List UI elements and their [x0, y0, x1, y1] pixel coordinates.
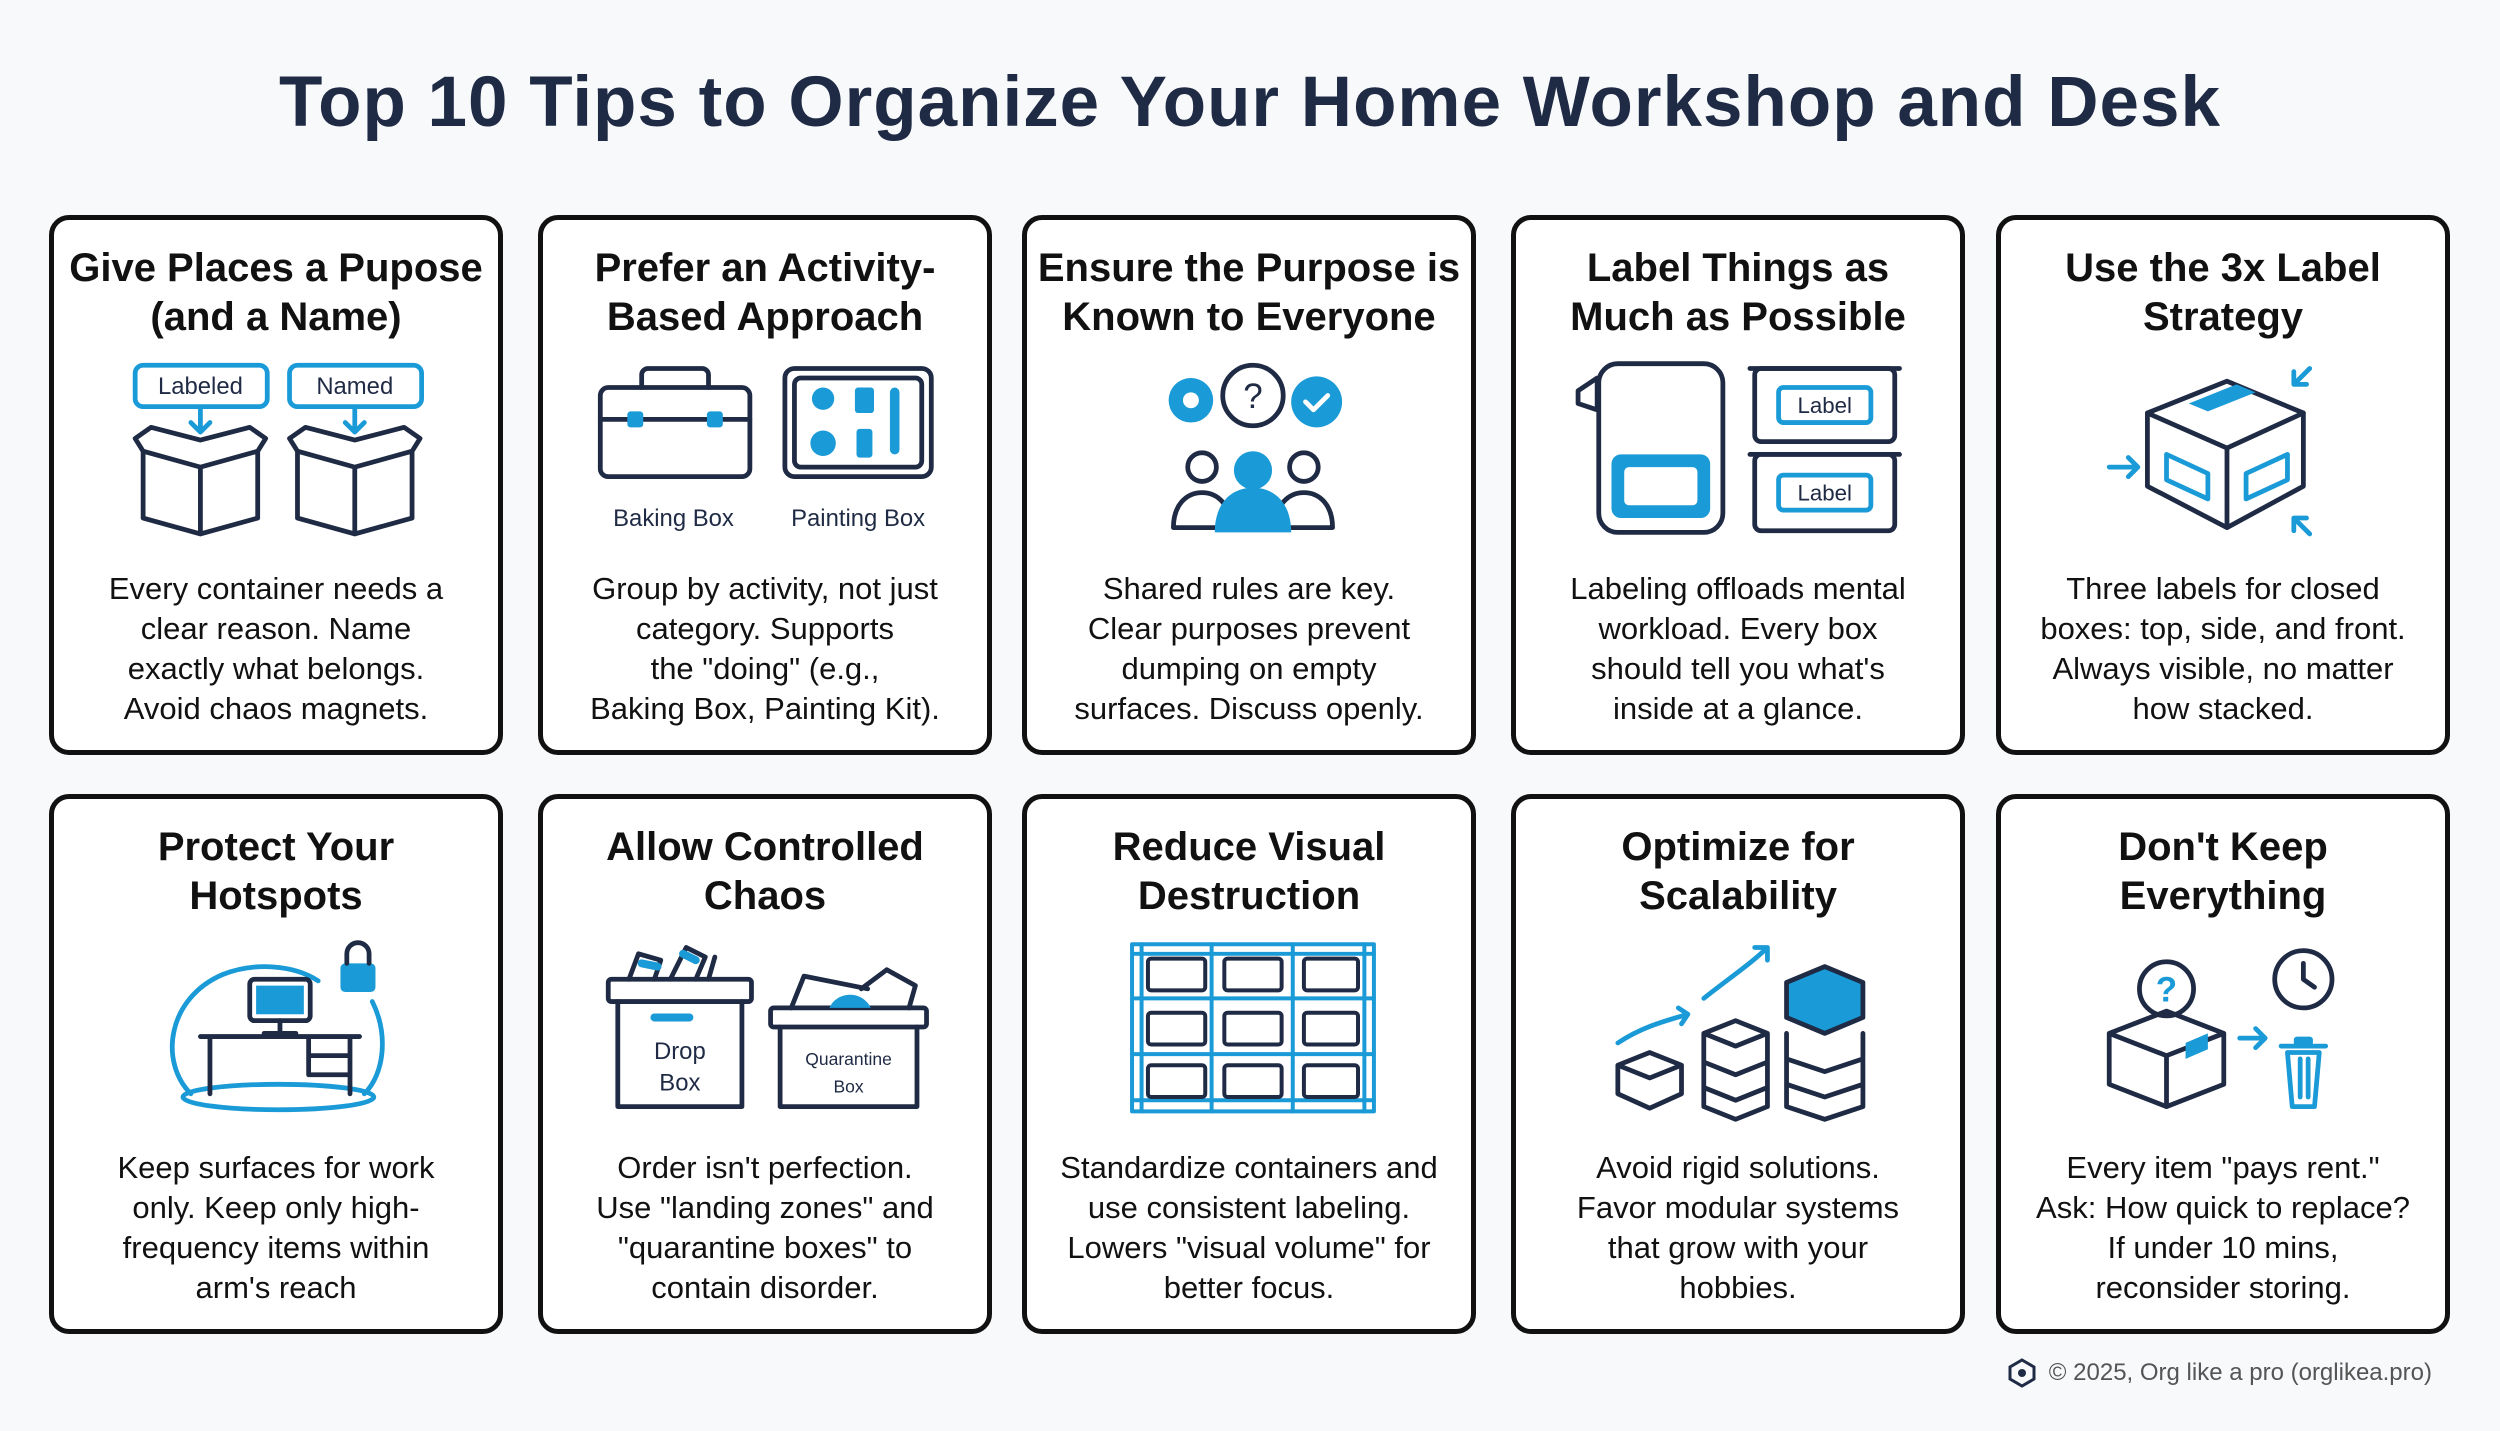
heading: Label Things as — [1587, 246, 1889, 290]
body text: Avoid rigid solutions. — [1596, 1150, 1880, 1185]
body text — [1074, 571, 1424, 726]
heading: Everything — [2120, 874, 2326, 918]
body text — [1577, 1150, 1899, 1305]
icon: drop box and quarantine box: Box — [833, 1076, 864, 1096]
heading — [595, 246, 935, 339]
body text: Group by activity, not just — [592, 571, 938, 606]
body text: hobbies. — [1679, 1270, 1797, 1305]
heading: Known to Everyone — [1062, 295, 1436, 339]
body text: reconsider storing. — [2095, 1270, 2350, 1305]
icon: drop box and quarantine box: Quarantine — [805, 1049, 892, 1069]
body text — [117, 1150, 435, 1305]
body text: Standardize containers and — [1060, 1150, 1438, 1185]
body text — [2040, 571, 2406, 726]
icon: drawer grid — [1130, 942, 1376, 1114]
heading — [2118, 825, 2328, 918]
heading: Give Places a Pupose — [69, 246, 483, 290]
panel: activity-based — [538, 215, 992, 755]
body text: Order isn't perfection. — [617, 1150, 913, 1185]
heading — [1570, 246, 1906, 339]
body text: frequency items within — [123, 1230, 429, 1265]
heading: (and a Name) — [150, 295, 402, 339]
icon: baking and painting boxes — [598, 366, 934, 532]
icon: drop box and quarantine box — [606, 945, 929, 1109]
icon: drop box and quarantine box: Drop — [654, 1038, 706, 1065]
heading — [1113, 825, 1385, 918]
heading: Based Approach — [607, 295, 923, 339]
body text: If under 10 mins, — [2108, 1230, 2338, 1265]
body text: Favor modular systems — [1577, 1190, 1899, 1225]
heading: Much as Possible — [1570, 295, 1906, 339]
heading — [158, 825, 394, 918]
heading — [1621, 825, 1855, 918]
body text: boxes: top, side, and front. — [2040, 611, 2406, 646]
icon: drop box and quarantine box: Box — [659, 1070, 700, 1097]
heading: Allow Controlled — [606, 825, 924, 869]
icon: labeled boxes: Named — [316, 373, 393, 400]
body text: Baking Box, Painting Kit). — [590, 691, 940, 726]
body text: exactly what belongs. — [128, 651, 424, 686]
heading: Reduce Visual — [1113, 825, 1385, 869]
body text: arm's reach — [196, 1270, 356, 1305]
body text: "quarantine boxes" to — [618, 1230, 912, 1265]
body text — [1570, 571, 1906, 726]
icon: label maker and containers: Label — [1797, 481, 1852, 506]
panel: purpose known — [1022, 215, 1476, 755]
icon: box question clock trash: ? — [2156, 971, 2177, 1010]
body text: better focus. — [1164, 1270, 1334, 1305]
icon: growing stacks — [1615, 945, 1866, 1122]
body text: contain disorder. — [651, 1270, 879, 1305]
panel: give places a purpose — [49, 215, 503, 755]
heading — [2065, 246, 2381, 339]
panel: don't keep everything — [1996, 794, 2450, 1334]
body text: Use "landing zones" and — [596, 1190, 934, 1225]
icon: labeled boxes — [132, 362, 424, 536]
body text: clear reason. Name — [141, 611, 411, 646]
body text: the "doing" (e.g., — [651, 651, 879, 686]
body text — [590, 571, 940, 726]
body text: Labeling offloads mental — [1570, 571, 1906, 606]
body text: Ask: How quick to replace? — [2036, 1190, 2410, 1225]
body text: that grow with your — [1608, 1230, 1868, 1265]
icon: labeled boxes: Labeled — [158, 373, 243, 400]
icon: logo — [2008, 1358, 2036, 1388]
heading: Chaos — [704, 874, 826, 918]
heading: Strategy — [2143, 295, 2303, 339]
body text: Every item "pays rent." — [2066, 1150, 2380, 1185]
panel: scalability — [1511, 794, 1965, 1334]
body text: Shared rules are key. — [1103, 571, 1395, 606]
body text: should tell you what's — [1591, 651, 1885, 686]
panel: reduce visual destruction — [1022, 794, 1476, 1334]
heading: Hotspots — [189, 874, 363, 918]
icon: box question clock trash — [2106, 948, 2334, 1109]
body text: surfaces. Discuss openly. — [1074, 691, 1424, 726]
panel: label things — [1511, 215, 1965, 755]
icon: baking and painting boxes: Baking Box — [613, 505, 734, 532]
body text — [1060, 1150, 1438, 1305]
title: Top 10 Tips to Organize Your Home Workshop and Desk — [279, 63, 2221, 142]
heading: Optimize for — [1621, 825, 1855, 869]
body text — [596, 1150, 934, 1305]
panel: protect hotspots — [49, 794, 503, 1334]
body text: dumping on empty — [1121, 651, 1377, 686]
body text: inside at a glance. — [1613, 691, 1863, 726]
heading — [1038, 246, 1460, 339]
body text — [2036, 1150, 2410, 1305]
body text: Every container needs a — [109, 571, 443, 606]
heading — [69, 246, 483, 339]
heading: Don't Keep — [2118, 825, 2328, 869]
icon: label maker and containers — [1576, 361, 1902, 535]
body text: Lowers "visual volume" for — [1067, 1230, 1431, 1265]
heading — [606, 825, 924, 918]
panel: 3x label — [1996, 215, 2450, 755]
body text: category. Supports — [636, 611, 894, 646]
heading: Protect Your — [158, 825, 394, 869]
icon: baking and painting boxes: Painting Box — [791, 505, 925, 532]
icon: people with gear question check — [1168, 362, 1342, 532]
heading: Destruction — [1138, 874, 1360, 918]
body text: Keep surfaces for work — [117, 1150, 435, 1185]
heading: Ensure the Purpose is — [1038, 246, 1460, 290]
icon: desk with lock — [170, 940, 385, 1112]
body text: how stacked. — [2133, 691, 2313, 726]
icon: label maker and containers: Label — [1797, 393, 1852, 418]
icon: people with gear question check: ? — [1243, 377, 1263, 416]
body text: workload. Every box — [1598, 611, 1878, 646]
body text: use consistent labeling. — [1088, 1190, 1410, 1225]
body text: Always visible, no matter — [2052, 651, 2394, 686]
heading: Use the 3x Label — [2065, 246, 2381, 290]
body text — [109, 571, 444, 726]
heading: Prefer an Activity- — [595, 246, 935, 290]
body text: Avoid chaos magnets. — [124, 691, 428, 726]
heading: Scalability — [1639, 874, 1837, 918]
body text: Clear purposes prevent — [1088, 611, 1410, 646]
icon: labeled cube with arrows — [2106, 366, 2312, 536]
footer credit: © 2025, Org like a pro (orglikea.pro) — [2049, 1359, 2432, 1386]
body text: only. Keep only high- — [132, 1190, 420, 1225]
panel: controlled chaos — [538, 794, 992, 1334]
body text: Three labels for closed — [2066, 571, 2380, 606]
